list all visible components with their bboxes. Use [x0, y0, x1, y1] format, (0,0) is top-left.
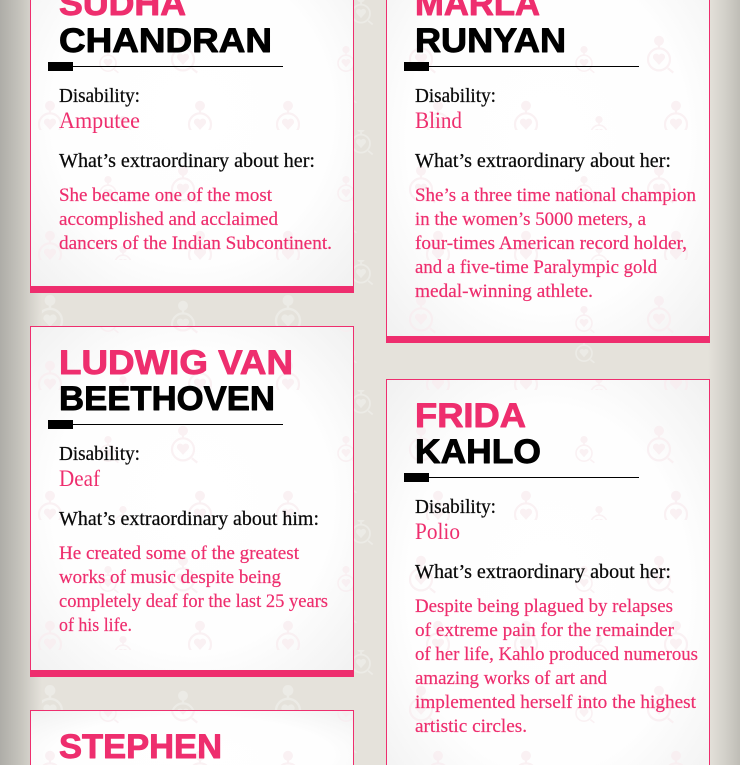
disability — [415, 496, 496, 544]
description: works of music despite being — [59, 568, 281, 588]
description: completely deaf for the last 25 years — [59, 592, 328, 612]
panel: Ludwig van Beethoven — [30, 326, 354, 677]
heading: Frida Kahlo — [415, 397, 541, 471]
heading: Sudha Chandran: CHANDRAN — [59, 22, 272, 60]
description: dancers of the Indian Subcontinent. — [59, 234, 332, 254]
subheading: What’s extraordinary about her: — [415, 561, 671, 583]
description: four-times American record holder, — [415, 234, 687, 254]
panel: Marla Runyan — [386, 0, 710, 343]
description: amazing works of art and — [415, 669, 608, 689]
description: Despite being plagued by relapses — [415, 597, 673, 617]
heading: Frida Kahlo: FRIDA — [415, 397, 526, 435]
description: medal-winning athlete. — [415, 282, 593, 302]
description: He created some of the greatest — [59, 544, 300, 564]
subheading: What’s extraordinary about him: — [59, 508, 319, 530]
heading rule — [48, 420, 283, 429]
description — [415, 597, 698, 737]
disability: Disability: — [415, 496, 496, 518]
description: She became one of the most — [59, 186, 273, 206]
heading: Ludwig van Beethoven — [59, 344, 293, 418]
subheading: What’s extraordinary about her: — [415, 150, 671, 172]
description: artistic circles. — [415, 717, 527, 737]
disability: Blind — [415, 108, 462, 133]
description: of extreme pain for the remainder — [415, 621, 674, 641]
description: in the women’s 5000 meters, a — [415, 210, 646, 230]
heading: Marla Runyan — [415, 0, 566, 60]
description: accomplished and acclaimed — [59, 210, 279, 230]
description — [59, 544, 328, 636]
heading: Sudha Chandran — [59, 0, 272, 60]
description — [59, 186, 332, 254]
description: of his life. — [59, 616, 132, 636]
disability — [59, 85, 140, 133]
heading: Marla Runyan: RUNYAN — [415, 22, 566, 60]
disability — [59, 443, 140, 491]
description: of her life, Kahlo produced numerous — [415, 645, 698, 665]
disability: Disability: — [59, 85, 140, 107]
description: and a five-time Paralympic gold — [415, 258, 658, 278]
subheading: What’s extraordinary about her: — [59, 150, 315, 172]
heading rule — [404, 473, 639, 482]
disability: Deaf — [59, 466, 100, 491]
panel: Frida Kahlo — [386, 380, 710, 765]
heading rule — [404, 62, 639, 71]
panel: Stephen — [30, 710, 354, 765]
heading rule — [48, 62, 283, 71]
disability — [415, 85, 496, 133]
heading: Frida Kahlo: KAHLO — [415, 433, 541, 471]
disability: Disability: — [59, 443, 140, 465]
disability: Polio — [415, 519, 460, 544]
heading: Stephen: STEPHEN — [59, 728, 222, 765]
description: She’s a three time national champion — [415, 186, 696, 206]
disability: Amputee — [59, 108, 140, 133]
panel: Sudha Chandran — [30, 0, 354, 293]
description: implemented herself into the highest — [415, 693, 697, 713]
heading: Ludwig van Beethoven: LUDWIG VAN — [59, 344, 293, 382]
disability: Disability: — [415, 85, 496, 107]
description — [415, 186, 696, 302]
heading: Ludwig van Beethoven: BEETHOVEN — [59, 380, 275, 418]
